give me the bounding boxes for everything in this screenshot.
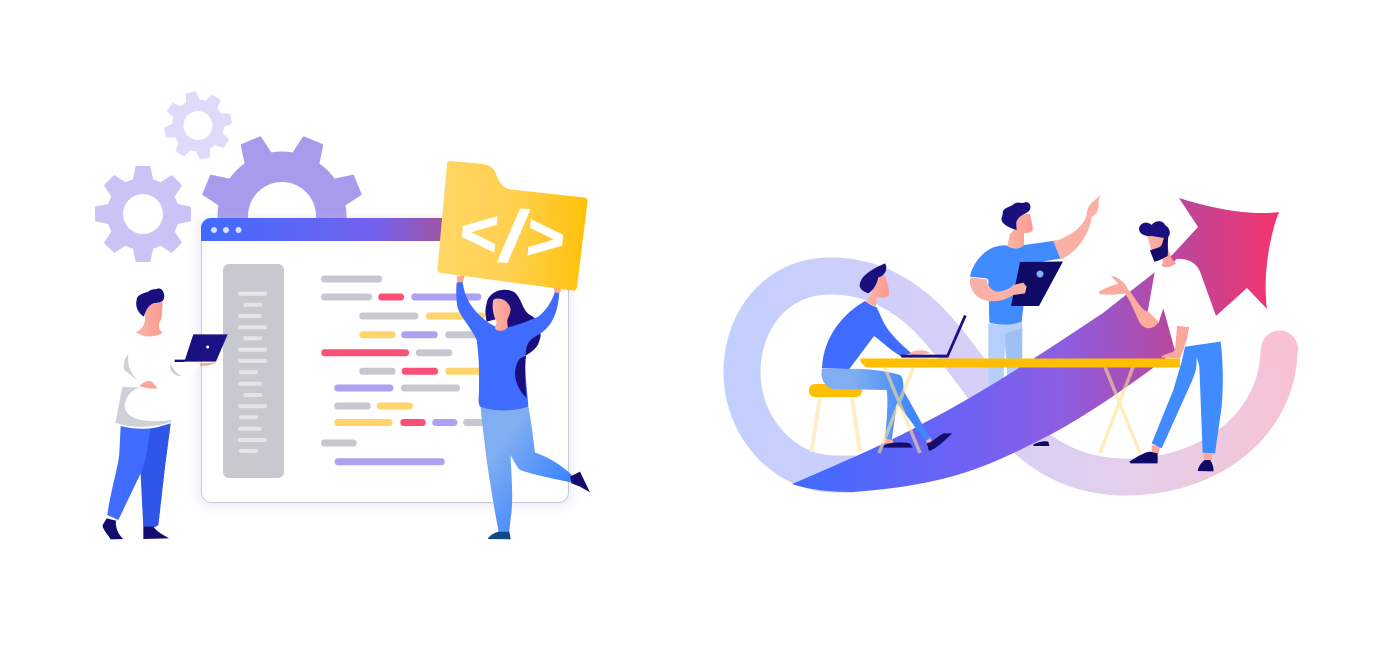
sidebar panel xyxy=(223,264,284,478)
woman lifting folder xyxy=(456,275,590,539)
small pale gear xyxy=(159,86,237,165)
infinity ribbon xyxy=(742,276,1279,477)
hair back xyxy=(485,290,541,398)
laptop xyxy=(175,334,228,362)
code editor window xyxy=(198,218,571,506)
t-shirt xyxy=(1148,259,1220,351)
sweater shadows xyxy=(115,354,183,427)
shoes xyxy=(103,518,169,539)
sweater xyxy=(822,301,912,369)
holding arm and hand xyxy=(970,277,1027,301)
bearded man gesturing xyxy=(1099,221,1223,471)
trousers xyxy=(107,423,171,527)
beard xyxy=(1150,235,1168,262)
person with laptop, left xyxy=(103,288,228,539)
shoes xyxy=(488,532,511,539)
window title bar xyxy=(201,218,460,241)
hair xyxy=(1002,202,1030,230)
sweater xyxy=(456,282,559,410)
face and neck xyxy=(1147,234,1176,267)
trousers xyxy=(481,407,575,532)
hands xyxy=(139,362,216,389)
seated man with laptop xyxy=(821,263,967,451)
raised arm xyxy=(1053,195,1101,259)
folder with code symbol xyxy=(437,161,588,291)
tablet xyxy=(1011,262,1063,306)
face xyxy=(493,298,511,331)
face xyxy=(865,275,889,307)
trousers xyxy=(988,321,1022,390)
hair xyxy=(136,288,164,317)
gesturing arm xyxy=(1099,276,1159,328)
laptop xyxy=(900,315,967,358)
hair xyxy=(1139,221,1170,238)
face xyxy=(1007,214,1033,248)
left lilac gear xyxy=(96,167,190,261)
code symbol: > xyxy=(524,200,568,275)
face and neck xyxy=(136,302,163,336)
shoes xyxy=(1129,452,1214,471)
shoes xyxy=(883,433,952,451)
standing man shoe xyxy=(1033,441,1049,446)
trousers xyxy=(1152,341,1223,453)
leaning arm and hand xyxy=(1161,326,1189,358)
hair xyxy=(860,263,886,293)
hands xyxy=(457,275,562,293)
growth arrow xyxy=(792,198,1279,492)
code lines xyxy=(321,276,485,465)
ribbon round end cap xyxy=(1261,330,1298,368)
feet xyxy=(1152,445,1212,461)
trousers xyxy=(821,369,930,441)
code symbol: < xyxy=(457,195,501,270)
hand xyxy=(910,350,931,355)
table xyxy=(860,358,1180,453)
t-shirt xyxy=(970,240,1062,325)
sweater xyxy=(120,332,200,425)
large purple gear xyxy=(202,136,362,280)
standing man with tablet xyxy=(970,195,1101,390)
feet xyxy=(885,437,933,447)
stool xyxy=(809,384,862,452)
long hair over sweater xyxy=(515,335,541,398)
code symbol slash: / xyxy=(494,197,532,277)
